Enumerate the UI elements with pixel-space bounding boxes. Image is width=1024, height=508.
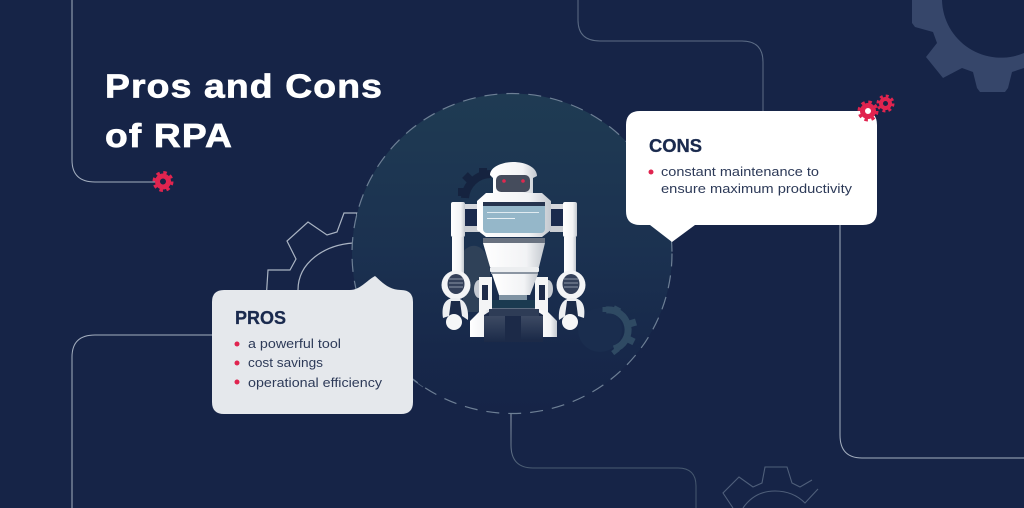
pros list (234, 336, 383, 390)
robot shadow (463, 246, 490, 312)
panel: pros (212, 276, 413, 414)
robot (442, 162, 586, 342)
icon: dark gear behind robot (458, 168, 491, 198)
icon: red gear cons large (859, 102, 877, 120)
title: Pros and Cons (105, 68, 383, 104)
pros list: cost savings (248, 355, 324, 370)
icon: outlined gear bottom right (723, 467, 818, 508)
title (105, 68, 383, 154)
icon: red gear left (154, 172, 172, 190)
robot left arm (442, 202, 470, 330)
cons heading: CONS (649, 136, 702, 156)
icon: large gear top right (912, 0, 1024, 92)
pros list: a powerful tool (248, 336, 341, 351)
icon: outlined gear left (267, 213, 357, 290)
robot torso (477, 193, 551, 316)
pros list: operational efficiency (248, 375, 383, 390)
icon: red gear cons small (878, 96, 893, 111)
robot head (490, 162, 537, 196)
robot arm connectors (465, 204, 563, 232)
pros heading: PROS (235, 308, 286, 328)
cons list: constant maintenance to (661, 164, 819, 179)
robot right arm (556, 202, 586, 330)
panel: cons (626, 111, 877, 242)
central circle (352, 94, 672, 414)
cons list (648, 164, 853, 196)
cons list: ensure maximum productivity (661, 181, 853, 196)
icon: dim gear inside circle (578, 307, 636, 353)
title: of RPA (105, 117, 233, 154)
robot legs behind torso (470, 277, 557, 337)
